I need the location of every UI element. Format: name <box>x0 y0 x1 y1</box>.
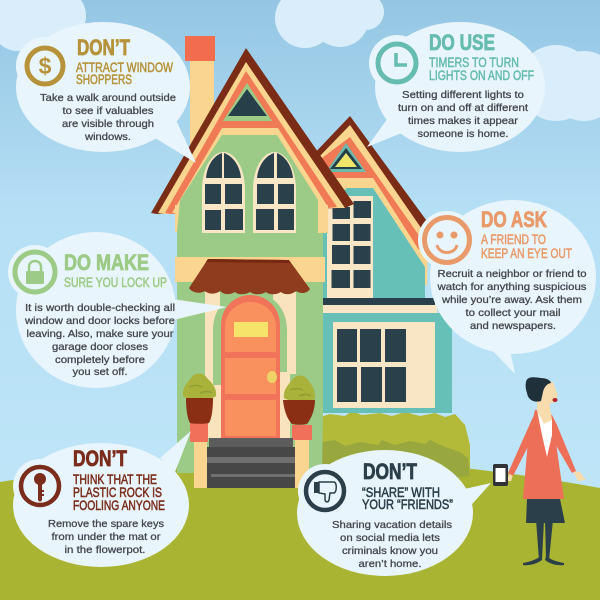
body text <box>398 89 528 140</box>
body text: Recruit a neighbor or friend to <box>438 268 587 280</box>
body text: you set off. <box>72 366 128 378</box>
gable window <box>223 83 272 121</box>
body text: completely before <box>55 354 145 366</box>
bubble: do use timers <box>367 22 545 152</box>
subheading: SHOPPERS <box>76 71 132 87</box>
body text: criminals know you <box>342 545 438 557</box>
right pedestal and planter <box>283 376 315 488</box>
body text: It is worth double-checking all <box>25 302 175 314</box>
body text: Setting different lights to <box>402 89 524 101</box>
side wing gable window <box>326 143 366 172</box>
icon: smiley <box>424 218 470 262</box>
blouse <box>537 410 552 457</box>
body text: to see if valuables <box>62 105 154 117</box>
heading: DO USE <box>429 30 495 55</box>
body text: aren’t home. <box>358 558 422 570</box>
body text <box>24 302 175 378</box>
bubble shape <box>13 431 191 567</box>
bubble: don't attract window shoppers <box>16 22 196 163</box>
bubble shape <box>8 232 227 388</box>
subheading: FOOLING ANYONE <box>73 497 165 513</box>
heading: DON’T <box>77 35 130 60</box>
subheading: “SHARE” WITH <box>362 484 440 500</box>
bubble: do ask a friend <box>418 200 596 374</box>
heading: DON’T <box>363 459 417 484</box>
body text <box>436 268 587 332</box>
body text: Sharing vacation details <box>332 519 452 531</box>
clouds <box>0 0 600 121</box>
body text: turn on and off at different <box>398 102 528 114</box>
subheading: TIMERS TO TURN <box>429 54 519 70</box>
body text: leaving. Also, make sure your <box>26 328 174 340</box>
main roof <box>151 48 354 214</box>
subheading: LIGHTS ON AND OFF <box>429 67 534 83</box>
bubble: don't share with friends <box>297 450 491 576</box>
house <box>151 36 452 488</box>
body text: garage door closes <box>52 341 148 353</box>
door <box>213 292 287 438</box>
body text <box>48 518 164 556</box>
legs and shoes <box>523 499 565 565</box>
hair <box>526 377 551 402</box>
heading: DO ASK <box>481 207 547 232</box>
subheading <box>429 54 534 83</box>
bubble shape <box>367 22 545 152</box>
side wing roof <box>310 116 432 285</box>
subheading: YOUR “FRIENDS” <box>362 496 453 512</box>
subheading: SURE YOU LOCK UP <box>64 274 167 290</box>
hedge <box>310 411 470 480</box>
subheading: ATTRACT WINDOW <box>76 59 174 75</box>
subheading <box>76 59 174 87</box>
woman with phone <box>493 377 586 565</box>
icon: dollar: $ <box>39 53 52 79</box>
heading: DO MAKE <box>64 250 149 275</box>
bubble shape <box>418 200 596 374</box>
heading: DON’T <box>73 446 127 471</box>
body text: times makes it appear <box>408 115 519 127</box>
cream band and porch posts <box>175 257 325 438</box>
icon: dollar <box>27 48 63 84</box>
left pedestal and planter <box>183 374 216 488</box>
awning <box>189 259 310 294</box>
subheading: THINK THAT THE <box>73 471 157 487</box>
lips <box>552 398 558 402</box>
icon: thumbs down <box>306 472 344 510</box>
icon: key <box>21 467 59 505</box>
ground hill <box>0 458 600 600</box>
body text: Take a walk around outside <box>40 92 176 104</box>
body text: someone is home. <box>418 128 508 140</box>
side wing wall <box>323 188 425 298</box>
body text: window and door locks before <box>24 315 175 327</box>
front steps <box>207 438 295 488</box>
chimney <box>185 36 215 155</box>
subheading: PLASTIC ROCK IS <box>73 484 162 500</box>
hands <box>507 471 586 481</box>
body text: windows. <box>84 131 131 143</box>
body text: while you’re away. Ask them <box>441 294 582 306</box>
bubble: do make sure you lock up <box>8 232 227 388</box>
body text: Remove the spare keys <box>48 518 164 530</box>
body text: in the flowerpot. <box>64 544 146 556</box>
coat <box>508 410 576 499</box>
body text <box>332 519 452 570</box>
icon: clock <box>378 44 416 82</box>
body text: to collect your mail <box>466 307 560 319</box>
subheading: A FRIEND TO <box>481 231 546 247</box>
icon: padlock <box>15 252 55 292</box>
side wing window <box>327 196 373 298</box>
body text <box>40 92 176 143</box>
arched window right <box>253 152 296 233</box>
main green wall <box>175 135 328 473</box>
bubble shape <box>297 450 491 576</box>
neck and face <box>537 382 558 424</box>
body text: and newspapers. <box>470 320 556 332</box>
subheading <box>481 231 572 261</box>
body text: on social media lets <box>340 532 440 544</box>
subheading <box>362 484 453 512</box>
bubble: don't think plastic rock <box>13 431 191 567</box>
body text: from under the mat or <box>52 531 161 543</box>
subheading <box>73 471 165 513</box>
arched window left <box>202 152 245 233</box>
body text: watch for anything suspicious <box>436 281 586 293</box>
lower teal block <box>322 298 452 413</box>
bubble shape <box>16 22 196 163</box>
body text: are visible through <box>62 118 154 130</box>
phone <box>493 464 508 486</box>
